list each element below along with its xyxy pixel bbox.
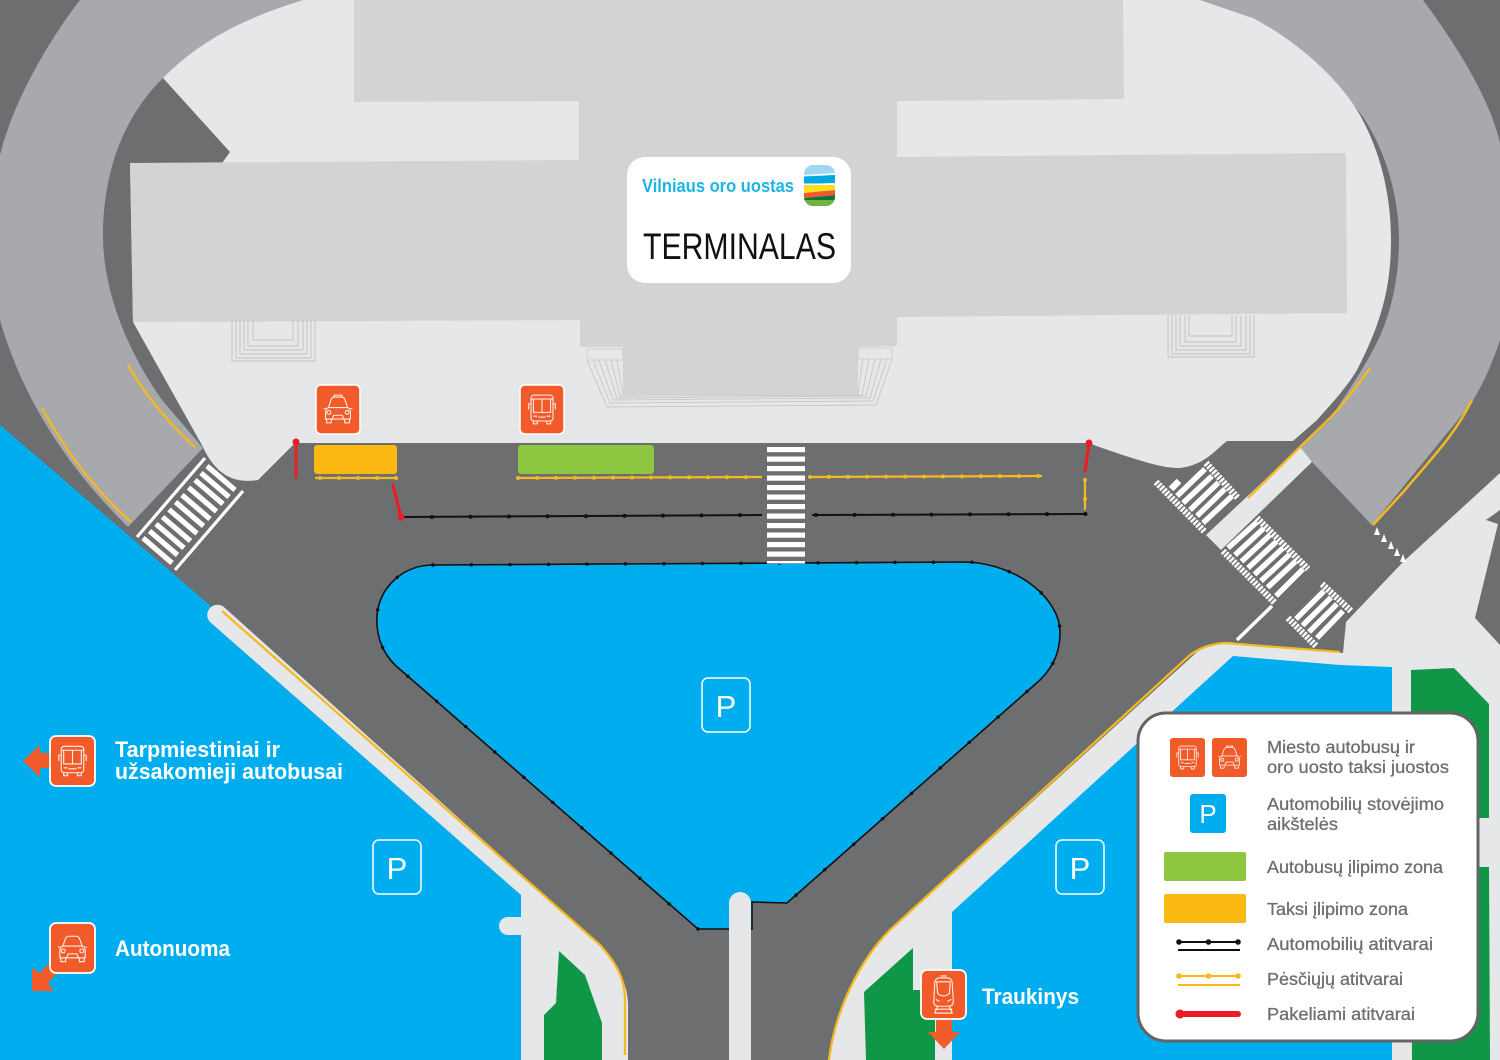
left small stairs — [232, 320, 315, 361]
left green area — [544, 951, 602, 1060]
arrow: train — [928, 1018, 960, 1049]
legend icon: taxi — [1212, 738, 1247, 777]
bus boarding zone — [518, 445, 654, 474]
terminal surrounding pavement — [130, 0, 1391, 481]
icon: city bus stop — [520, 385, 564, 434]
left parking area — [0, 425, 521, 1060]
icon: taxi stop — [316, 385, 360, 434]
arrow: intercity buses — [23, 745, 52, 777]
legend symbol: pedestrian barriers — [1176, 973, 1241, 985]
legend text: stops: Miesto autobusų ir — [1267, 737, 1415, 757]
arrow: car rental — [32, 962, 58, 991]
parking sign: right — [1056, 840, 1104, 894]
taxi boarding zone — [314, 445, 397, 474]
parking sign: right: P — [1070, 851, 1090, 886]
right elevated road ramp — [1200, 0, 1500, 525]
pedestrian island strip — [1206, 447, 1312, 550]
yield triangles — [1374, 527, 1406, 562]
label: car rental: Autonuoma — [115, 936, 231, 961]
icon: car rental — [50, 923, 95, 973]
far right road island — [1475, 510, 1500, 645]
legend text: stops: oro uosto taksi juostos — [1267, 757, 1449, 777]
central median strip — [729, 892, 751, 1060]
legend text: parking — [1267, 794, 1444, 834]
parking sign: central: P — [716, 689, 736, 724]
right small stairs — [1168, 315, 1254, 357]
legend text: lifting barriers: Pakeliami atitvarai — [1267, 1004, 1415, 1024]
label: intercity buses: užsakomieji autobusai — [115, 759, 343, 784]
far right green areas — [1411, 668, 1490, 1060]
label: train: Traukinys — [982, 984, 1079, 1009]
right pavement — [828, 473, 1500, 1060]
legend text: taxi boarding: Taksi įlipimo zona — [1267, 899, 1408, 919]
parking sign: central — [702, 678, 750, 732]
legend swatch: taxi boarding — [1164, 894, 1246, 923]
terminal label: TERMINALAS — [643, 226, 836, 267]
legend icon: parking: P — [1199, 799, 1217, 829]
icon: train — [921, 970, 966, 1019]
parking sign: left — [373, 840, 421, 894]
panel: legend — [1138, 713, 1478, 1041]
right green area near train — [864, 948, 935, 1060]
right parking area — [952, 656, 1392, 1060]
legend text: bus boarding: Autobusų įlipimo zona — [1267, 857, 1443, 877]
car barriers at kerb — [401, 514, 1086, 517]
airport name: Vilniaus oro uostas — [642, 176, 794, 196]
left sidewalk — [207, 605, 628, 1060]
lifting barriers — [292, 438, 1092, 520]
icon: intercity bus — [50, 736, 95, 786]
pedestrian barriers at kerb — [315, 476, 1085, 510]
legend text: parking: Automobilių stovėjimo — [1267, 794, 1444, 814]
legend text: stops — [1267, 737, 1449, 777]
legend swatch: bus boarding — [1164, 852, 1246, 881]
legend symbol: car barriers — [1176, 939, 1241, 950]
parking sign: left: P — [387, 851, 407, 886]
legend text: parking: aikštelės — [1267, 814, 1338, 834]
label: intercity buses: Tarpmiestiniai ir — [115, 737, 280, 762]
legend text: pedestrian barriers: Pėsčiųjų atitvarai — [1267, 969, 1403, 989]
terminal lower porch edges — [587, 348, 892, 360]
label: intercity buses — [115, 737, 343, 784]
pedestrian barriers on ramps — [42, 365, 1472, 1060]
left elevated road ramp — [0, 0, 303, 527]
right zebra crossings — [1156, 463, 1351, 646]
legend icon: bus — [1170, 738, 1205, 777]
terminal sign card — [627, 157, 851, 283]
central zebra crossing — [767, 447, 805, 564]
legend symbol: lifting barriers — [1176, 1010, 1238, 1018]
central parking island — [377, 562, 1060, 929]
terminal building — [130, 0, 1347, 395]
legend icon: parking — [1190, 794, 1226, 833]
icon: airport logo — [804, 165, 835, 206]
left zebra crossing — [137, 458, 243, 570]
terminal central stairs — [587, 359, 892, 407]
legend text: car barriers: Automobilių atitvarai — [1267, 934, 1433, 954]
